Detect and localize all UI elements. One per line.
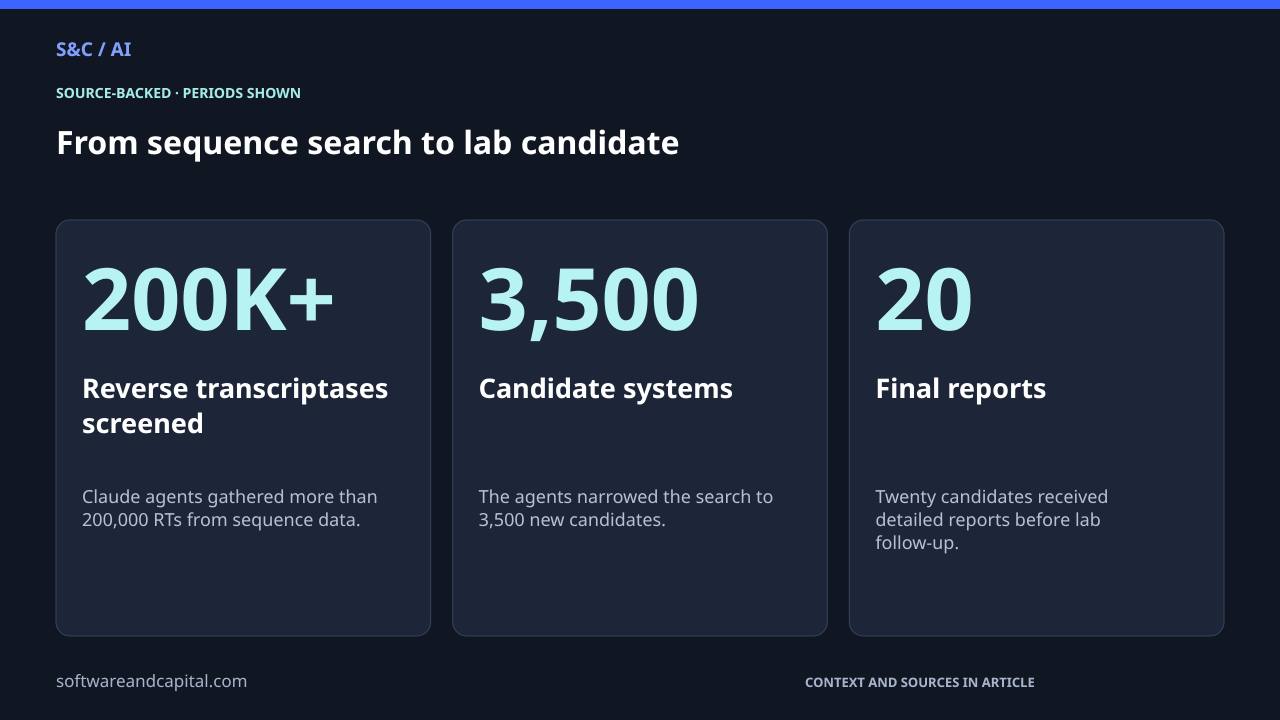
- description: detailed reports: follow-up.: [875, 531, 959, 555]
- stat: 3,500: 3,500: [479, 239, 700, 356]
- footer: site name: softwareandcapital.com: [56, 669, 248, 692]
- description: narrowed search: 3,500 new candidates.: [479, 508, 666, 532]
- label: candidate systems: Candidate systems: [479, 369, 733, 406]
- description: RTs gathered: 200,000 RTs from sequence data.: [82, 508, 361, 532]
- eyebrow: SOURCE-BACKED · PERIODS SHOWN: [56, 84, 301, 103]
- description: narrowed search: [479, 485, 773, 532]
- description: RTs gathered: [82, 485, 378, 532]
- top accent bar: [0, 0, 1280, 9]
- label: reverse transcriptases screened: [82, 369, 388, 441]
- panel: candidate systems: [453, 220, 827, 636]
- stat: 20: 20: [875, 239, 974, 356]
- stat: 200K+: 200K+: [82, 239, 336, 356]
- description: detailed reports: Twenty candidates received: [875, 485, 1108, 509]
- label: reverse transcriptases screened: Reverse transcriptases: [82, 369, 388, 406]
- footer: sources note: CONTEXT AND SOURCES IN ARTICLE: [805, 673, 1035, 691]
- brand label: S&C / AI: [56, 36, 131, 62]
- panel: reverse transcriptases: [56, 220, 431, 636]
- label: reverse transcriptases screened: screened: [82, 404, 204, 441]
- title: From sequence search to lab candidate: [56, 121, 680, 164]
- label: final reports: Final reports: [875, 369, 1047, 406]
- description: detailed reports: detailed reports before lab: [875, 508, 1101, 532]
- description: RTs gathered: Claude agents gathered more than: [82, 485, 378, 509]
- description: narrowed search: The agents narrowed the search to: [479, 485, 773, 509]
- description: detailed reports: [875, 485, 1108, 555]
- panel: final reports: [849, 220, 1224, 636]
